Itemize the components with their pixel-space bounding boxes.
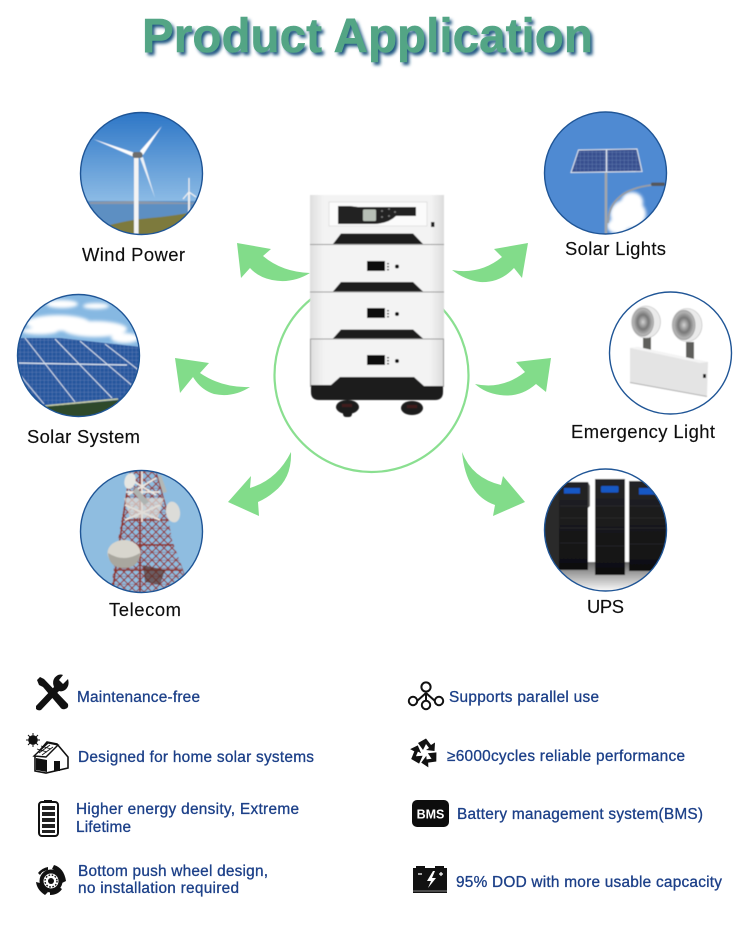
battery module 3 and base (311, 340, 443, 400)
panel: emergency light photo (609, 292, 733, 416)
label: telecom: Telecom (109, 599, 181, 620)
panel: telecom photo (80, 470, 204, 595)
feature: maintenance-free (36, 674, 200, 710)
top control unit (310, 195, 444, 244)
feature: DOD (413, 866, 722, 893)
feature: energy density (39, 800, 299, 836)
title: Product Application (142, 10, 593, 63)
feature: home solar: Designed for home solar systems (78, 749, 314, 766)
ring behind battery (274, 278, 468, 472)
panel: wind power photo (80, 112, 204, 236)
panel: solar lights photo (544, 112, 668, 236)
label: wind power: Wind Power (82, 244, 185, 265)
feature: parallel use: Supports parallel use (449, 689, 599, 706)
arrow: to solar lights (452, 243, 528, 282)
panel: solar system photo (17, 294, 141, 420)
icon: battery (39, 800, 58, 836)
label: solar system: Solar System (27, 426, 140, 447)
feature: parallel use (409, 682, 599, 709)
arrow: to emergency light (475, 358, 551, 396)
feature: home solar (26, 733, 314, 773)
arrow: to solar system (175, 358, 250, 395)
battery module 2 (310, 292, 444, 338)
title: Product Application (144, 13, 596, 66)
icon: recycle (407, 738, 440, 769)
feature: energy density: Lifetime (76, 819, 131, 836)
label: solar lights: Solar Lights (565, 238, 666, 259)
icon: connected nodes (409, 682, 443, 709)
icon: BMS badge (412, 800, 449, 827)
wheels (336, 400, 423, 417)
feature: push wheel: Bottom push wheel design, (78, 863, 268, 880)
icon: car battery (413, 866, 447, 893)
arrow: to UPS (462, 452, 525, 516)
feature: maintenance-free: Maintenance-free (77, 689, 200, 706)
feature: energy density: Higher energy density, Extreme (76, 801, 299, 818)
arrow: to telecom (228, 452, 291, 516)
feature: BMS: Battery management system(BMS) (457, 806, 703, 823)
icon: tools (36, 674, 69, 710)
feature: BMS (412, 800, 703, 827)
battery stack (310, 195, 444, 417)
icon: house with sun (26, 733, 68, 773)
battery module 1 (310, 245, 444, 292)
feature: push wheel: no installation required (78, 880, 239, 897)
feature: push wheel (36, 863, 268, 897)
feature: DOD: 95% DOD with more usable capcacity (456, 874, 722, 891)
arrow: to wind power (237, 243, 310, 281)
panel: UPS photo (544, 468, 669, 592)
icon: BMS badge: BMS (417, 808, 444, 822)
label: UPS: UPS (587, 596, 624, 617)
icon: wheel (36, 865, 66, 895)
feature: cycles: ≥6000cycles reliable performance (447, 748, 685, 765)
label: emergency light: Emergency Light (571, 421, 715, 442)
feature: cycles (407, 738, 685, 769)
